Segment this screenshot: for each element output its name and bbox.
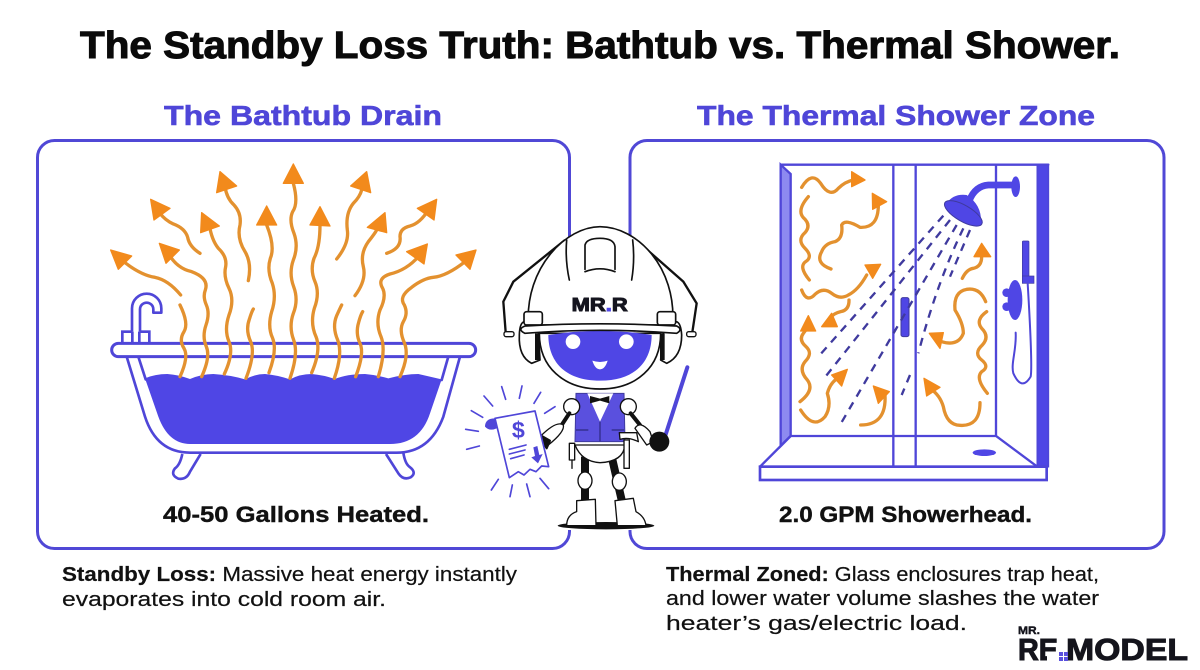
legs xyxy=(578,457,626,500)
pointer stick xyxy=(665,367,687,437)
enclosure frame xyxy=(760,165,1048,467)
heat arrows xyxy=(800,172,991,425)
heading: the thermal shower zone: The Thermal Shower Zone xyxy=(697,100,1095,131)
logo window icon xyxy=(1059,652,1068,661)
shower illustration xyxy=(760,165,1048,480)
helmet dome xyxy=(528,227,673,325)
face screen xyxy=(548,331,652,381)
water xyxy=(145,374,442,444)
panel: thermal shower xyxy=(630,140,1164,548)
logo: mr. remodel xyxy=(1018,625,1188,667)
brim clips xyxy=(524,312,676,325)
text block: standby loss: evaporates into cold room air. xyxy=(62,589,386,611)
receipt xyxy=(485,411,549,478)
text block: thermal zoned: heater’s gas/electric load. xyxy=(666,613,967,635)
title: The Standby Loss Truth: Bathtub vs. Thermal Shower. xyxy=(80,25,1120,67)
tub body xyxy=(127,357,460,453)
left arm xyxy=(536,399,580,448)
right arm xyxy=(620,399,669,452)
text block: thermal zoned xyxy=(666,564,1099,635)
bow tie xyxy=(590,396,609,403)
helmet label: MR.R xyxy=(572,294,628,315)
label: 2.0 GPM showerhead: 2.0 GPM Showerhead. xyxy=(779,502,1032,527)
faucet xyxy=(122,294,161,343)
smile xyxy=(592,361,608,369)
head xyxy=(539,333,661,389)
label: 40-50 gallons heated: 40-50 Gallons Heated. xyxy=(163,502,429,527)
vest xyxy=(575,393,625,442)
bathtub illustration xyxy=(111,164,476,479)
water spray xyxy=(818,216,970,425)
shower base xyxy=(760,467,1047,480)
logo: mr. remodel: MR. xyxy=(1018,625,1040,637)
eyes xyxy=(566,334,634,349)
tub rim xyxy=(112,343,476,357)
ear cups xyxy=(504,322,696,363)
shower controls xyxy=(1002,241,1034,383)
panel: bathtub xyxy=(38,140,570,548)
logo: mr. remodel: MODEL xyxy=(1066,632,1188,667)
text block: thermal zoned: and lower water volume slashes the water xyxy=(666,588,1099,610)
text block: standby loss: Standby Loss: Massive heat energy instantly xyxy=(62,564,517,586)
steam arrows xyxy=(111,164,476,378)
drain xyxy=(973,449,996,456)
text block: standby loss xyxy=(62,564,517,611)
right wall xyxy=(1037,165,1048,467)
boots xyxy=(567,498,646,526)
left wall xyxy=(781,165,791,446)
helmet brim xyxy=(521,324,680,333)
helmet straps xyxy=(503,240,697,337)
text block: thermal zoned: Thermal Zoned: Glass enclosures trap heat, xyxy=(666,564,1099,586)
tub inner edges xyxy=(138,357,448,380)
tub feet xyxy=(173,453,414,479)
heading: the bathtub drain: The Bathtub Drain xyxy=(164,100,442,131)
robot mascot xyxy=(466,225,698,530)
white backing over panel edges xyxy=(505,225,698,530)
door handle xyxy=(901,298,909,337)
tool belt xyxy=(569,433,638,468)
receipt sparkle xyxy=(466,386,555,497)
helmet ridges xyxy=(566,238,634,280)
ground shadow xyxy=(558,522,654,529)
logo: mr. remodel: RE xyxy=(1018,632,1058,667)
shower head xyxy=(941,176,1020,231)
receipt: $ xyxy=(512,417,525,443)
